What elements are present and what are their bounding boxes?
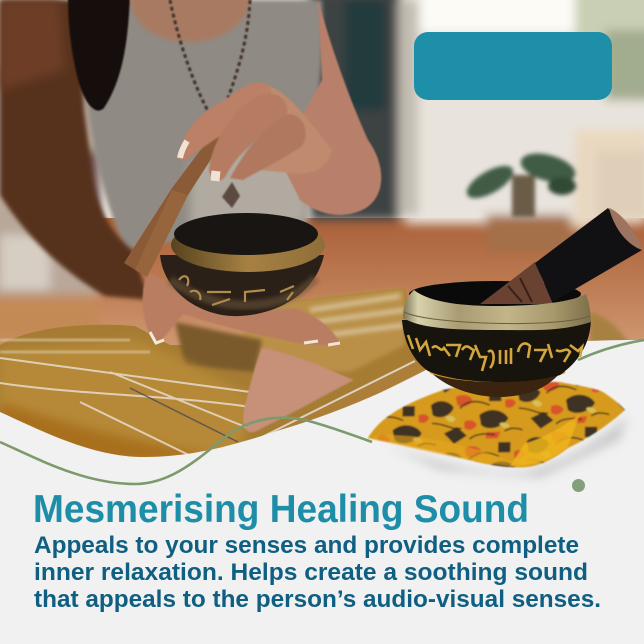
white wave panel (0, 340, 644, 644)
hand holding striker (178, 83, 332, 181)
cupped hand (143, 272, 339, 346)
brocade cushion (368, 382, 625, 467)
bowl body (160, 255, 324, 316)
hair (68, 0, 130, 111)
wooden striker (124, 128, 222, 277)
green wave line (0, 418, 372, 484)
necklace (170, 0, 250, 118)
inscription pattern on bowl (408, 335, 582, 371)
felt-wrapped mallet (480, 208, 642, 304)
body text (34, 532, 601, 613)
singing bowl on cushion (368, 208, 642, 478)
photo: meditation scene background (0, 0, 644, 480)
knee (243, 348, 354, 432)
teal label box (414, 32, 612, 100)
cushion shadow (385, 415, 628, 478)
bowl gold rim (403, 290, 591, 330)
body text: Appeals to your senses and provides complete (34, 532, 579, 559)
body text: that appeals to the person’s audio-visual senses. (34, 586, 601, 613)
decorative green dot (572, 479, 585, 492)
bowl gold rim (171, 234, 325, 272)
bowl body (402, 320, 591, 382)
lap: striped golden fabric (0, 288, 629, 457)
woman's torso (84, 0, 323, 250)
title: Mesmerising Healing Sound (33, 488, 529, 531)
chest skin (128, 0, 250, 42)
body text: inner relaxation. Helps create a soothing sound (34, 559, 588, 586)
fabric behind second bowl (590, 312, 630, 345)
icon: blurred plant (462, 148, 578, 217)
arm and shoulder on the left (0, 0, 150, 300)
bowl foot (425, 362, 568, 397)
arm on the right (285, 0, 381, 215)
bowl opening (174, 213, 318, 255)
bowl opening (409, 281, 581, 307)
bowl held in hand (143, 213, 340, 346)
diagonal fabric fold (240, 358, 440, 462)
